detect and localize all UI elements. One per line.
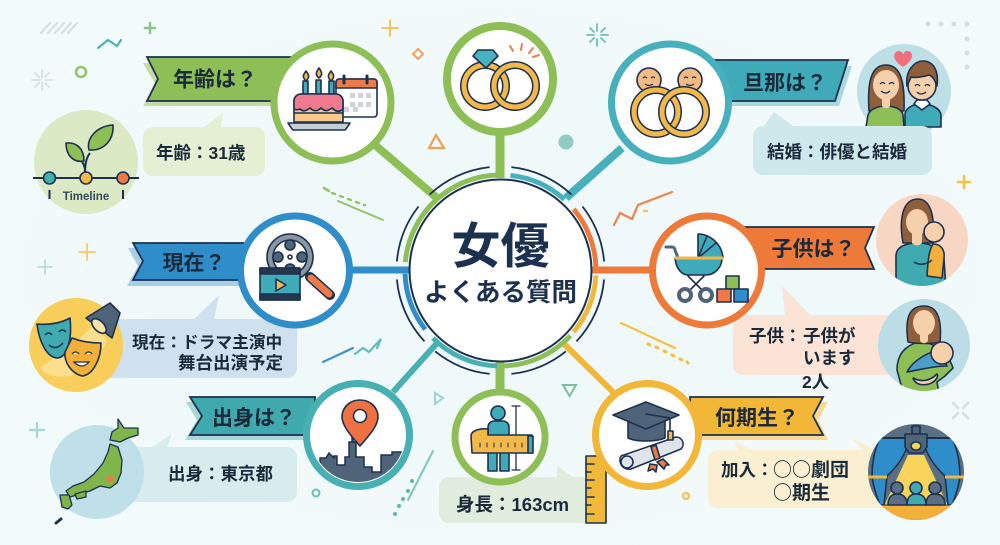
icon: stage circle xyxy=(866,424,966,521)
icon: wedding rings with diamond xyxy=(464,44,539,107)
children speech bubble: います xyxy=(803,348,856,368)
current speech bubble: 現在：ドラマ主演中 xyxy=(132,333,282,352)
generation ribbon xyxy=(690,397,828,440)
current ribbon label: 現在？ xyxy=(162,252,226,275)
icon: mother and baby circle xyxy=(878,299,970,394)
age ribbon xyxy=(143,57,300,106)
icon: graduation cap and diploma xyxy=(613,402,683,472)
icon: theatre masks circle xyxy=(29,298,123,392)
current speech bubble: 舞台出演予定 xyxy=(178,353,283,373)
current ribbon xyxy=(127,243,250,286)
husband node ring with icon xyxy=(612,44,728,161)
generation speech bubble: 加入： xyxy=(721,460,774,480)
husband ribbon xyxy=(715,60,852,106)
height bubble text: 身長：163cm xyxy=(456,494,569,515)
icon: person with tape measure xyxy=(471,406,533,471)
children node ring with icon xyxy=(652,216,762,325)
generation ribbon label: 何期生？ xyxy=(715,407,799,430)
height speech bubble xyxy=(439,466,595,523)
icon: film reel xyxy=(267,234,313,280)
panel: height xyxy=(439,392,606,523)
panel: current status xyxy=(29,216,350,392)
icon: timeline sprout circle: Timeline xyxy=(63,191,109,203)
panel: children xyxy=(652,194,970,394)
icon: birthday cake xyxy=(288,68,350,130)
icon: Japan map xyxy=(50,419,144,523)
current speech bubble xyxy=(100,295,297,378)
connector lines xyxy=(345,133,655,392)
age speech bubble: 年齢：31歳 xyxy=(156,143,246,163)
husband ribbon label: 旦那は？ xyxy=(743,72,827,95)
children speech bubble xyxy=(733,286,910,392)
central circle xyxy=(410,180,592,362)
hometown ribbon label: 出身は？ xyxy=(212,407,296,430)
current node ring with icon xyxy=(240,216,350,325)
generation speech bubble: ○○劇団 xyxy=(773,455,849,482)
icon: timeline sprout circle xyxy=(33,110,139,214)
icon: calendar xyxy=(336,76,377,117)
panel: age xyxy=(143,44,391,176)
generation speech bubble xyxy=(708,438,886,508)
panel: generation xyxy=(596,384,966,521)
thin outer arcs xyxy=(397,167,604,374)
subtitle: よくある質問 xyxy=(424,279,577,307)
children speech bubble: 2人 xyxy=(802,372,830,392)
icon: film strip and magnifier xyxy=(260,268,330,300)
coloured arcs xyxy=(405,175,596,366)
children ribbon xyxy=(745,227,874,269)
icon: rings with faces xyxy=(634,68,706,134)
hometown speech bubble: 出身：東京都 xyxy=(168,464,273,484)
hometown ribbon xyxy=(185,397,315,440)
husband speech bubble xyxy=(753,112,932,175)
icon: toy blocks xyxy=(717,276,748,302)
icon: city skyline and pin xyxy=(320,400,403,492)
icon: couple circle xyxy=(857,44,951,138)
age speech bubble xyxy=(143,113,265,176)
icon: baby stroller xyxy=(666,234,723,301)
generation node ring with icon xyxy=(596,384,698,486)
central hub xyxy=(397,167,604,374)
husband speech bubble: 結婚：俳優と結婚 xyxy=(767,142,907,162)
title: 女優 xyxy=(451,220,550,274)
panel: top rings node xyxy=(447,26,553,132)
age ribbon label: 年齢は？ xyxy=(173,68,257,92)
panel: hometown xyxy=(50,384,410,523)
age node ring with icon xyxy=(274,44,391,161)
children ribbon label: 子供は？ xyxy=(772,238,856,261)
generation speech bubble: ○期生 xyxy=(773,478,830,505)
children speech bubble: 子供が xyxy=(803,326,856,346)
height node ring with icon xyxy=(455,392,545,482)
hometown speech bubble xyxy=(120,434,297,502)
hometown node ring with icon xyxy=(306,384,410,492)
panel: husband xyxy=(612,44,951,175)
icon: ruler xyxy=(586,456,606,523)
children speech bubble: 子供： xyxy=(749,326,802,346)
icon: mother and toddler circle xyxy=(876,194,968,290)
